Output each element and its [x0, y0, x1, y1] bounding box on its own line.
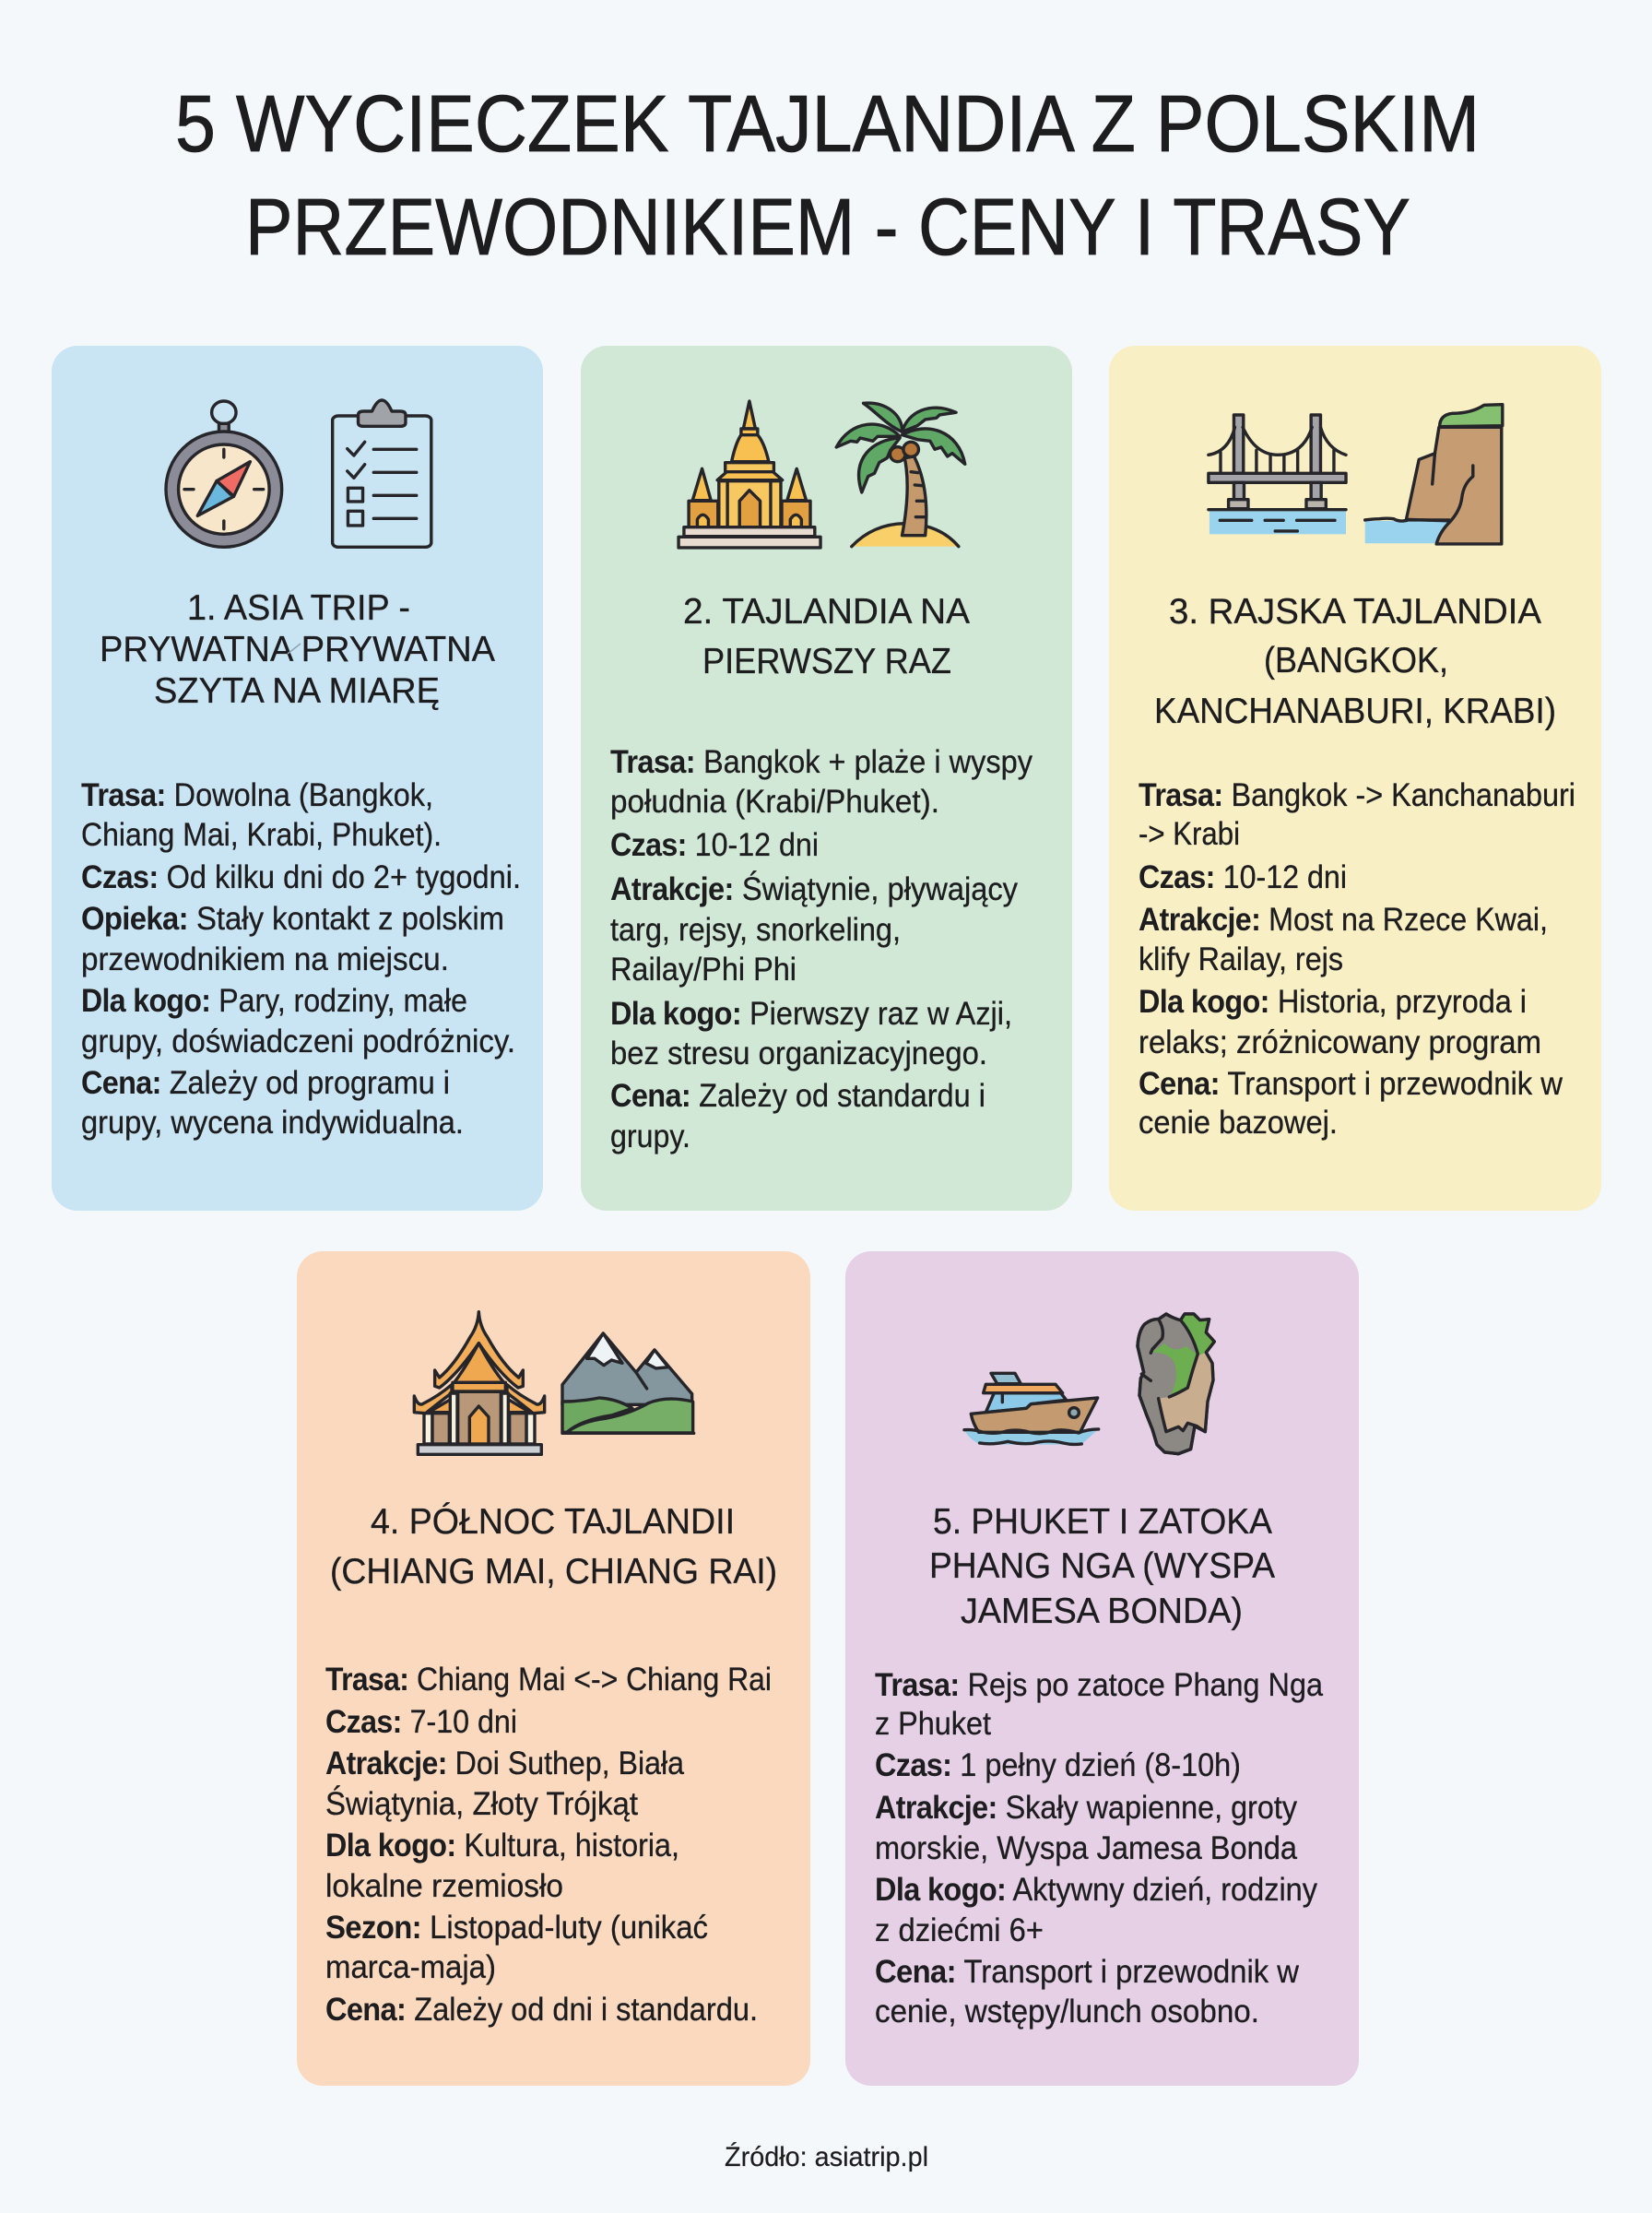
icon: thai temple [414, 1312, 545, 1454]
text: card 3 details: relaks; zróżnicowany program [1139, 1024, 1541, 1060]
text: card 1 details: Cena: Zależy od programu i [81, 1065, 450, 1101]
text: card 3 details: Cena: Transport i przewodnik w [1139, 1066, 1564, 1102]
text: card 3 details [1139, 777, 1575, 1141]
icon: James Bond rock [1138, 1314, 1214, 1454]
icon: compass [166, 401, 282, 547]
title [175, 79, 1480, 272]
text: card 1 details [81, 777, 521, 1141]
panel: 2 Tajlandia na pierwszy raz [581, 346, 1072, 1211]
icon: mountains [562, 1333, 694, 1433]
heading: card 1: SZYTA NA MIARĘ [154, 671, 440, 711]
text: card 5 details: cenie, wstępy/lunch osobno. [875, 1994, 1259, 2030]
text: card 4 details: Sezon: Listopad-luty (unikać [325, 1910, 708, 1946]
text: card 4 details: Cena: Zależy od dni i standardu. [325, 1992, 758, 2028]
text: card 2 details: Dla kogo: Pierwszy raz w Azji, [610, 996, 1012, 1032]
panel: 5 Phuket i zatoka Phang Nga [845, 1251, 1359, 2086]
title: 5 WYCIECZEK TAJLANDIA Z POLSKIM [175, 79, 1480, 169]
heading: card 2: 2. TAJLANDIA NA [683, 592, 970, 632]
text: card 1 details: Opieka: Stały kontakt z polskim [81, 901, 504, 937]
heading: card 2 [683, 592, 970, 681]
heading: card 5: PHANG NGA (WYSPA [929, 1546, 1275, 1586]
icon: cliff by the sea [1365, 405, 1503, 544]
heading: card 3: KANCHANABURI, KRABI) [1154, 692, 1556, 731]
text: card 1 details: Chiang Mai, Krabi, Phuket). [81, 817, 442, 853]
text: card 1 details: Trasa: Dowolna (Bangkok, [81, 777, 433, 813]
heading: card 1 [100, 588, 495, 711]
title: PRZEWODNIKIEM - CENY I TRASY [245, 183, 1410, 272]
heading: card 2: PIERWSZY RAZ [702, 642, 951, 681]
text: card 4 details: Trasa: Chiang Mai <-> Chiang Rai [325, 1662, 772, 1698]
text: card 1 details: grupy, wycena indywidualna. [81, 1105, 464, 1141]
text: card 2 details: Cena: Zależy od standardu i [610, 1078, 985, 1114]
text: card 3 details: Czas: 10-12 dni [1139, 859, 1347, 895]
heading: card 1: 1. ASIA TRIP - [187, 588, 410, 628]
text: card 1 details: grupy, doświadczeni podróżnicy. [81, 1024, 515, 1059]
icon: boat [964, 1373, 1099, 1445]
text: card 2 details: Railay/Phi Phi [610, 952, 796, 988]
text: card 2 details [610, 744, 1032, 1154]
heading: card 4: (CHIANG MAI, CHIANG RAI) [330, 1552, 777, 1592]
text: card 4 details [325, 1662, 772, 2028]
source footer: Źródło: asiatrip.pl [725, 2142, 928, 2172]
text: card 4 details: Atrakcje: Doi Suthep, Biała [325, 1746, 684, 1781]
heading: card 5 [929, 1502, 1275, 1631]
text: card 4 details: Czas: 7-10 dni [325, 1704, 517, 1740]
text: card 2 details: Trasa: Bangkok + plaże i wyspy [610, 744, 1032, 780]
text: card 5 details: Cena: Transport i przewodnik w [875, 1954, 1300, 1990]
text: card 4 details: marca-maja) [325, 1949, 496, 1985]
text: card 4 details: Świątynia, Złoty Trójkąt [325, 1785, 638, 1822]
icon: suspension bridge [1209, 415, 1346, 534]
heading: card 3: (BANGKOK, [1264, 641, 1448, 680]
heading: card 5: JAMESA BONDA) [961, 1592, 1243, 1631]
text: card 5 details [875, 1667, 1323, 2030]
text: card 1 details: przewodnikiem na miejscu. [81, 941, 449, 977]
text: card 5 details: Czas: 1 pełny dzień (8-10h) [875, 1747, 1241, 1783]
text: card 5 details: Dla kogo: Aktywny dzień, rodziny [875, 1872, 1317, 1908]
text: card 2 details: bez stresu organizacyjnego. [610, 1035, 987, 1071]
text: card 5 details: Atrakcje: Skały wapienne, groty [875, 1790, 1297, 1826]
text: card 1 details: Czas: Od kilku dni do 2+ tygodni. [81, 859, 521, 895]
text: card 1 details: Dla kogo: Pary, rodziny, małe [81, 983, 467, 1019]
text: card 3 details: Atrakcje: Most na Rzece Kwai, [1139, 902, 1548, 938]
text: card 2 details: targ, rejsy, snorkeling, [610, 912, 901, 948]
text: card 3 details: Trasa: Bangkok -> Kanchanaburi [1139, 777, 1575, 813]
icon: golden temple [678, 401, 820, 548]
panel: 4 Północ Tajlandii [297, 1251, 810, 2086]
text: card 5 details: morskie, Wyspa Jamesa Bonda [875, 1830, 1297, 1866]
heading: card 4 [330, 1502, 777, 1592]
text: card 4 details: Dla kogo: Kultura, historia, [325, 1828, 679, 1864]
text: card 3 details: cenie bazowej. [1139, 1105, 1338, 1141]
text: card 4 details: lokalne rzemiosło [325, 1868, 563, 1904]
heading: card 5: 5. PHUKET I ZATOKA [933, 1502, 1272, 1542]
icon: checklist clipboard [333, 400, 431, 547]
text: card 3 details: Dla kogo: Historia, przyroda i [1139, 984, 1527, 1020]
text: card 3 details: -> Krabi [1139, 816, 1240, 852]
heading: card 3: 3. RAJSKA TAJLANDIA [1169, 592, 1541, 632]
heading: card 3 [1154, 592, 1556, 731]
icon: palm tree [836, 403, 965, 547]
panel: 3 Rajska Tajlandia [1109, 346, 1601, 1211]
text: card 5 details: z dziećmi 6+ [875, 1912, 1044, 1948]
panel: 1 Asia Trip [52, 346, 543, 1211]
text: card 2 details: Atrakcje: Świątynie, pływający [610, 870, 1018, 907]
text: card 2 details: Czas: 10-12 dni [610, 827, 819, 863]
text: card 5 details: z Phuket [875, 1706, 991, 1742]
heading: card 4: 4. PÓŁNOC TAJLANDII [371, 1502, 735, 1542]
text: card 2 details: południa (Krabi/Phuket). [610, 784, 939, 820]
text: card 3 details: klify Railay, rejs [1139, 941, 1343, 977]
heading: card 1: PRYWATNA PRYWATNA [100, 630, 495, 669]
text: card 2 details: grupy. [610, 1118, 690, 1154]
text: card 5 details: Trasa: Rejs po zatoce Phang Nga [875, 1667, 1323, 1703]
